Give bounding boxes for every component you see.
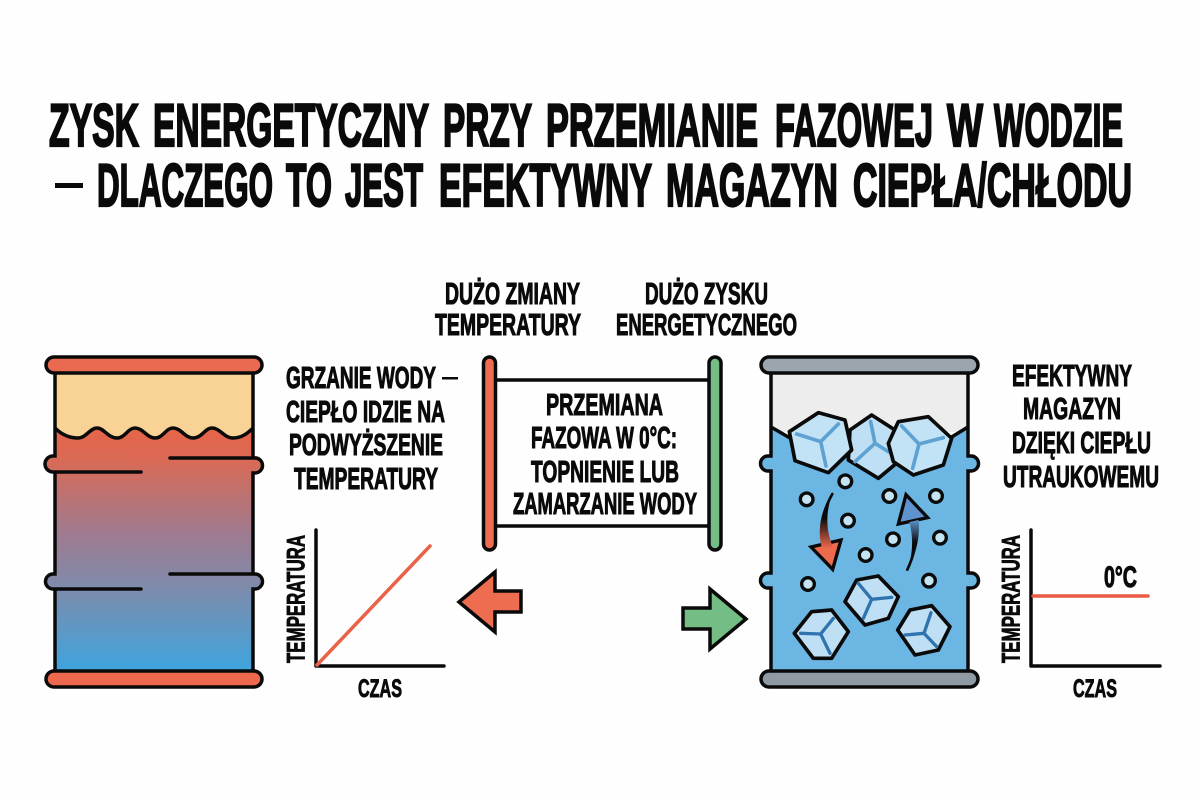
left text: heating water: TEMPERATURY — [294, 461, 438, 496]
left text: heating water: CIEPŁO IDZIE NA — [286, 394, 445, 429]
line chart: constant temperature at 0°C — [998, 530, 1160, 703]
right text: effective storage — [1003, 358, 1159, 494]
heading: much energy gain: DUŻO ZYSKU — [645, 276, 768, 311]
heading: much energy gain — [616, 276, 797, 342]
bubbles — [800, 475, 946, 590]
line chart: constant temperature at 0°C: 0°C — [1104, 561, 1137, 594]
central panel: phase change: ZAMARZANIE WODY — [513, 486, 697, 521]
circulation arrows — [811, 494, 928, 570]
central panel: phase change: PRZEMIANA — [546, 387, 663, 422]
title — [49, 92, 1132, 219]
right text: effective storage: MAGAZYN — [1023, 391, 1121, 426]
left barrel: heated water — [44, 357, 264, 687]
central panel: phase change: FAZOWA W 0°C: — [531, 420, 677, 455]
heading: much temperature change — [435, 276, 581, 342]
left text: heating water: PODWYŻSZENIE — [289, 427, 443, 462]
ice cubes — [789, 413, 952, 658]
title: ENERGETYCZNY — [153, 92, 429, 159]
arrow: left, red — [459, 572, 521, 632]
right barrel: water with melting ice — [760, 357, 980, 687]
heading: much temperature change: TEMPERATURY — [435, 307, 581, 342]
line chart: temperature rises over time: CZAS — [358, 675, 402, 703]
title: PRZEMIANIE — [546, 92, 758, 159]
line chart: temperature rises over time — [282, 530, 444, 703]
central panel: phase change — [484, 357, 721, 550]
line chart: constant temperature at 0°C: TEMPERATURA — [998, 535, 1026, 663]
title: DLACZEGO — [97, 152, 273, 219]
left text: heating water: GRZANIE WODY — [286, 360, 436, 395]
title: JEST — [345, 152, 423, 219]
arrow: right, green — [683, 589, 746, 649]
title: PRZY — [443, 92, 532, 159]
left text: heating water — [286, 360, 458, 496]
title: ZYSK — [49, 92, 139, 159]
title: EFEKTYWNY — [439, 152, 652, 219]
heading: much energy gain: ENERGETYCZNEGO — [616, 307, 797, 342]
line chart: temperature rises over time: TEMPERATURA — [282, 535, 310, 663]
title: FAZOWEJ — [775, 92, 933, 159]
line chart: constant temperature at 0°C: CZAS — [1073, 675, 1117, 703]
title: TO — [286, 152, 332, 219]
title: MAGAZYN — [666, 152, 838, 219]
central panel: phase change: TOPNIENIE LUB — [531, 454, 679, 489]
title: W — [947, 92, 983, 159]
heading: much temperature change: DUŻO ZMIANY — [445, 276, 580, 311]
